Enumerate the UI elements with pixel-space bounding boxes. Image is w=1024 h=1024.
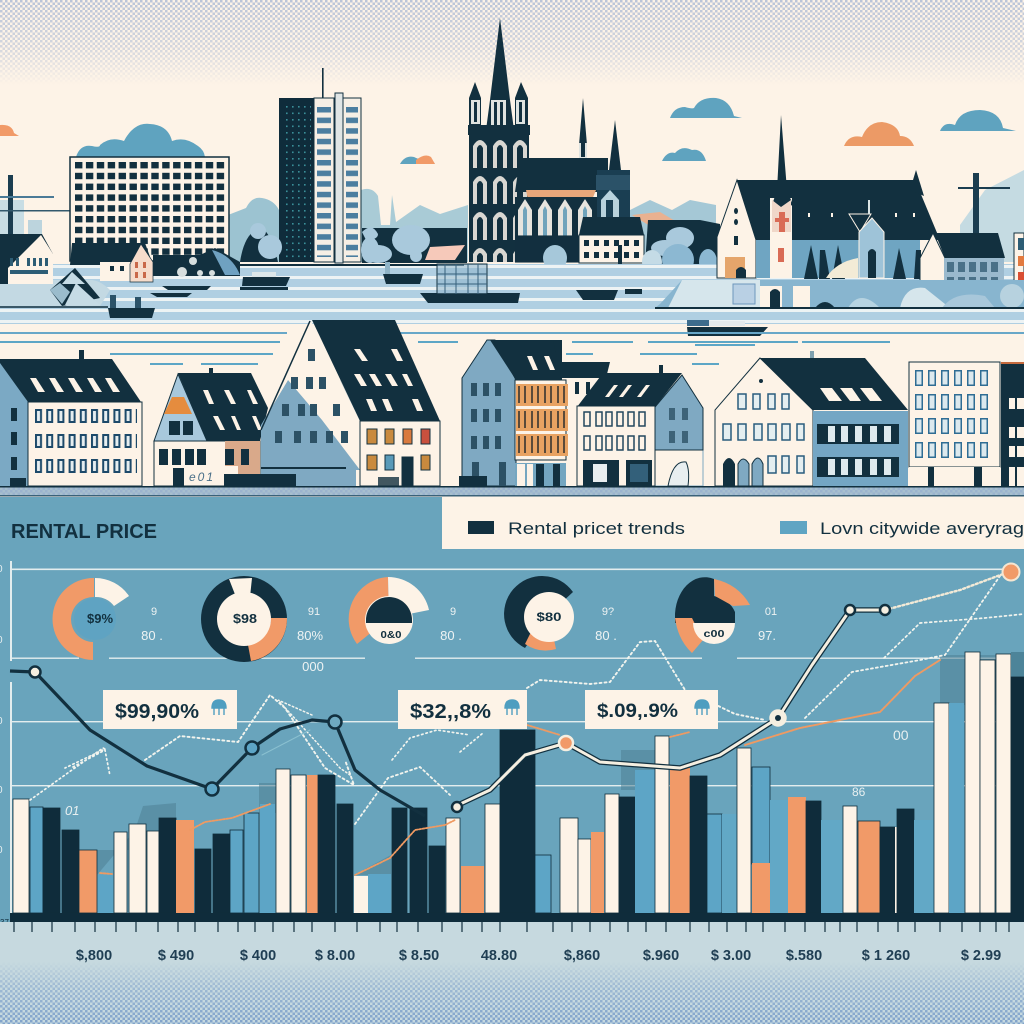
river boats <box>108 262 768 336</box>
donut 4 values: 80 . <box>595 628 617 643</box>
x axis ticks <box>14 922 1009 932</box>
donut 2 <box>201 576 287 662</box>
distant hazy skyline <box>0 170 1024 262</box>
white riverside house <box>579 217 644 277</box>
light rental price trend line <box>456 610 885 806</box>
x axis labels: 48.80 <box>481 948 517 964</box>
chart grid lines <box>10 561 1011 922</box>
donut 3 <box>349 577 429 644</box>
large church <box>717 115 940 279</box>
foreground building 5 <box>577 365 703 486</box>
dotted trend lines <box>30 574 1024 875</box>
river <box>0 264 1024 324</box>
legend: Rental pricet trends <box>508 519 685 538</box>
heading: RENTAL PRICE <box>11 521 157 543</box>
x axis labels <box>76 948 1001 964</box>
callout 3: $.09,.9% <box>597 701 678 722</box>
chart baseline <box>10 913 1024 922</box>
donut 4 values <box>595 606 617 643</box>
donut 2 values: 000 <box>302 659 324 674</box>
foreground building 2 <box>154 368 296 486</box>
foreground building 6 <box>715 351 908 486</box>
x axis labels: $ 490 <box>158 948 194 964</box>
donut 2 values: 91 <box>308 606 320 618</box>
donut 4 values: 9? <box>602 606 614 618</box>
translucent area shapes behind bars <box>97 655 1010 875</box>
axis labels: 86 <box>852 785 866 799</box>
x axis labels: $,800 <box>76 948 112 964</box>
axis labels: 01 <box>65 803 79 818</box>
right riverside building and pylon <box>920 173 1024 300</box>
x axis labels: $ 8.00 <box>315 948 355 964</box>
axis labels: 37 <box>0 918 9 927</box>
river lines over cream <box>0 332 1024 365</box>
donut 5 values: 97. <box>758 628 776 643</box>
donut 3 values: 9 <box>450 606 456 618</box>
navy roof between cathedral and church <box>645 220 720 265</box>
sky background <box>0 0 1024 490</box>
x axis labels: $,860 <box>564 948 600 964</box>
halftone sky band <box>0 0 1024 85</box>
callout 2: $32,,8% <box>410 701 491 723</box>
donut 3: 0&0 <box>380 630 402 641</box>
x axis labels: $.960 <box>643 948 679 964</box>
callout 1 <box>103 690 237 729</box>
office block <box>70 157 229 261</box>
donut 1 <box>53 578 129 660</box>
x axis labels: $ 1 260 <box>862 948 910 964</box>
x axis labels: $.580 <box>786 948 822 964</box>
donut 1 values: 80 . <box>141 628 163 643</box>
foreground building 4 <box>459 340 610 486</box>
cathedral <box>468 18 630 263</box>
bar chart <box>13 652 1024 913</box>
x axis labels: $ 2.99 <box>961 948 1001 964</box>
donut 3 values <box>440 606 462 643</box>
foreground building 2: e01 <box>189 470 213 484</box>
data point markers <box>30 564 1020 812</box>
donut 5 values <box>758 606 777 643</box>
donut 2: $98 <box>233 611 257 626</box>
foreground building 7 <box>909 362 1024 486</box>
axis labels: 00 <box>893 727 909 743</box>
skyline clouds <box>0 98 1016 164</box>
callout 2 <box>398 690 527 729</box>
callout 1: $99,90% <box>115 701 199 723</box>
chart panel background <box>0 497 1024 922</box>
donut 3 values: 80 . <box>440 628 462 643</box>
donut 5 <box>675 577 750 653</box>
trees and rounded shrubs <box>240 223 717 304</box>
x axis labels: $ 400 <box>240 948 276 964</box>
footer background <box>0 922 1024 1024</box>
legend: Lovn citywide averyrag <box>820 519 1024 538</box>
residential tower <box>279 68 361 263</box>
x axis labels: $ 3.00 <box>711 948 751 964</box>
legend <box>442 497 1024 549</box>
x axis labels: $ 8.50 <box>399 948 439 964</box>
donut 5: c00 <box>704 629 725 640</box>
right embankment <box>655 280 1024 309</box>
donut 4: $80 <box>536 610 562 624</box>
donut 4 <box>504 576 574 651</box>
donut 1 values: 9 <box>151 606 157 618</box>
donut 2 values <box>297 606 324 674</box>
donut 1 values <box>141 606 163 643</box>
donut 2 values: 80% <box>297 628 323 643</box>
halftone footer band <box>0 962 1024 1024</box>
pavement strip <box>0 486 1024 496</box>
dark rental price trend line <box>10 671 425 816</box>
donut 1: $9% <box>87 611 113 626</box>
foreground building 1 <box>0 350 142 486</box>
axis labels <box>0 564 909 927</box>
pylon on left <box>0 175 70 235</box>
left shore houses <box>0 234 240 307</box>
callout 3 <box>585 690 718 729</box>
donut 5 values: 01 <box>765 606 777 618</box>
foreground building 3 <box>224 320 440 486</box>
